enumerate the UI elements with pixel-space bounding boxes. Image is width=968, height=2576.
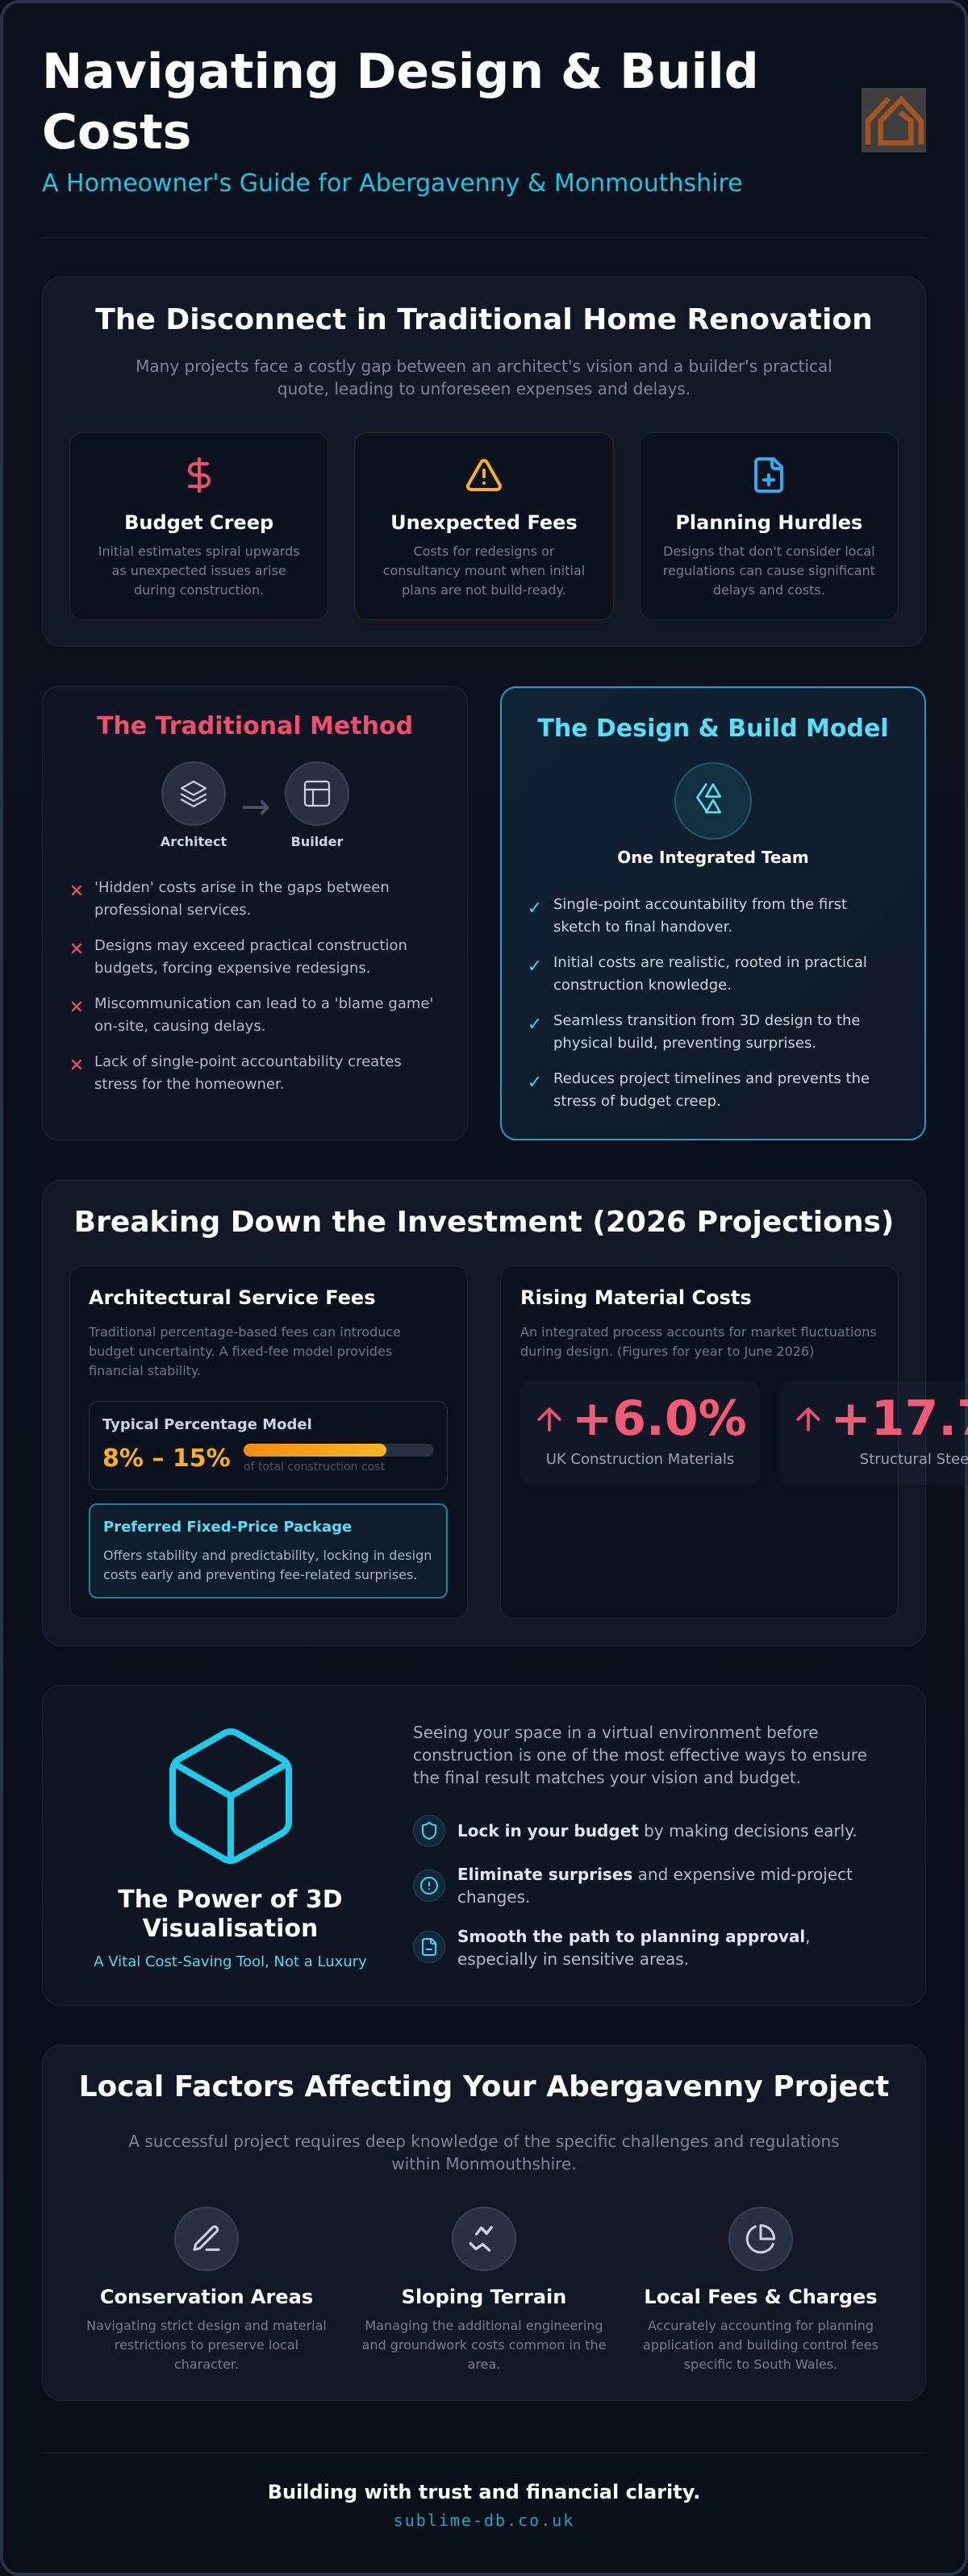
- card text: delays and costs.: [713, 582, 825, 598]
- benefit text: especially in sensitive areas.: [457, 1949, 689, 1969]
- intro text: Seeing your space in a virtual environment before: [413, 1723, 819, 1742]
- title: Costs: [42, 104, 191, 160]
- intro text: within Monmouthshire.: [391, 2153, 577, 2173]
- box text: costs early and preventing fee-related surprises.: [103, 1566, 417, 1582]
- list: benefits: ✓: [528, 1015, 542, 1035]
- icon: shield: [413, 1815, 445, 1847]
- caption: of total construction cost: [244, 1461, 385, 1473]
- card text: [89, 1324, 401, 1378]
- intro text: construction is one of the most effective ways to ensure: [413, 1745, 867, 1765]
- box title: Typical Percentage Model: [102, 1416, 312, 1433]
- label: architect: Architect: [161, 834, 227, 849]
- icon: dollar: [188, 457, 211, 493]
- card: budget creep: [69, 432, 328, 620]
- progress bar: [244, 1444, 434, 1457]
- heading: The Traditional Method: [97, 712, 413, 740]
- card title: Budget Creep: [124, 511, 273, 534]
- card text: financial stability.: [89, 1363, 201, 1378]
- card title: Planning Hurdles: [675, 511, 862, 534]
- panel: traditional method: [42, 686, 468, 1140]
- icon: pie chart: [728, 2207, 793, 2271]
- stat value: +6.0%: [572, 1390, 747, 1447]
- list: drawbacks: ✕: [69, 998, 84, 1018]
- intro text: Many projects face a costly gap between an architect's vision and a builder's practical: [136, 356, 832, 376]
- list: benefits: stress of budget creep.: [553, 1093, 721, 1110]
- column title: Sloping Terrain: [402, 2286, 566, 2308]
- heading: The Disconnect in Traditional Home Renovation: [95, 303, 873, 336]
- intro text: the final result matches your vision and budget.: [413, 1768, 801, 1787]
- column text: character.: [174, 2357, 239, 2372]
- column: conservation areas: [86, 2207, 327, 2372]
- icon: alert circle: [413, 1869, 445, 1902]
- card text: Initial estimates spiral upwards: [98, 544, 300, 559]
- list: benefits: physical build, preventing surprises.: [553, 1035, 816, 1052]
- box title: Preferred Fixed-Price Package: [103, 1519, 352, 1536]
- list: benefits: ✓: [528, 1073, 542, 1093]
- benefit: eliminate surprises: [413, 1865, 853, 1907]
- column text: Accurately accounting for planning: [648, 2318, 874, 2333]
- card text: Costs for redesigns or: [413, 544, 554, 559]
- list: benefits: construction knowledge.: [553, 977, 732, 994]
- list: drawbacks: ✕: [69, 940, 84, 960]
- column text: [643, 2318, 878, 2372]
- list: drawbacks: Lack of single-point accountability creates: [94, 1053, 402, 1070]
- title: [42, 44, 759, 160]
- list: drawbacks: ✕: [69, 1056, 84, 1076]
- card text: during construction.: [134, 582, 264, 598]
- heading: [118, 1886, 343, 1943]
- header: [42, 44, 926, 238]
- panel: the disconnect: [42, 277, 926, 647]
- icon: builder: [285, 761, 349, 826]
- card: architectural service fees: [69, 1265, 468, 1619]
- icon: terrain: [452, 2207, 516, 2271]
- card: rising material costs: [500, 1265, 899, 1619]
- footer: [42, 2453, 926, 2541]
- column text: Managing the additional engineering: [365, 2318, 603, 2333]
- list: benefits: ✓: [528, 898, 542, 919]
- card text: [663, 544, 875, 598]
- icon: integrated team: [674, 762, 752, 840]
- benefit text: Lock in your budget by making decisions early.: [457, 1821, 857, 1840]
- column text: specific to South Wales.: [684, 2357, 837, 2372]
- card: unexpected fees: [354, 432, 614, 620]
- card text: regulations can cause significant: [663, 563, 875, 578]
- logo: [862, 88, 926, 152]
- list: drawbacks: professional services.: [94, 902, 251, 919]
- card text: during design. (Figures for year to June 2026): [520, 1344, 814, 1359]
- list: benefits: sketch to final handover.: [553, 919, 732, 936]
- card text: plans are not build-ready.: [402, 582, 566, 598]
- footer tagline: Building with trust and financial clarity.: [268, 2481, 700, 2503]
- card heading: Rising Material Costs: [520, 1286, 752, 1309]
- card text: [520, 1324, 877, 1359]
- subtitle: A Homeowner's Guide for Abergavenny & Monmouthshire: [42, 169, 743, 198]
- typical percentage box: [89, 1401, 448, 1490]
- column text: [362, 2318, 606, 2372]
- benefit text: [457, 1927, 811, 1969]
- column text: restrictions to preserve local: [115, 2337, 298, 2353]
- heading: Local Factors Affecting Your Abergavenny Project: [79, 2070, 889, 2103]
- card text: consultancy mount when initial: [383, 563, 585, 578]
- card text: Designs that don't consider local: [663, 544, 875, 559]
- heading: The Power of 3D: [118, 1886, 343, 1914]
- fixed price box: [89, 1503, 448, 1599]
- icon: pen: [174, 2207, 239, 2271]
- panel: design and build model: [500, 686, 926, 1140]
- panel: local factors: [42, 2045, 926, 2401]
- icon: warning: [466, 459, 502, 491]
- card: planning hurdles: [640, 432, 899, 620]
- heading: The Design & Build Model: [537, 715, 889, 743]
- panel: breaking down the investment: [42, 1180, 926, 1646]
- icon: file plus: [754, 457, 783, 493]
- list: drawbacks: on-site, causing delays.: [94, 1018, 265, 1035]
- list: drawbacks: [69, 879, 433, 1093]
- value: 8% – 15%: [102, 1444, 231, 1473]
- icon: architect: [161, 761, 226, 826]
- benefit: planning approval: [413, 1927, 811, 1969]
- column text: and groundwork costs common in the: [362, 2337, 606, 2353]
- list: drawbacks: 'Hidden' costs arise in the gaps between: [94, 879, 390, 896]
- list: benefits: [528, 896, 870, 1110]
- box text: Offers stability and predictability, locking in design: [103, 1547, 432, 1563]
- intro text: [136, 356, 832, 398]
- column: sloping terrain: [362, 2207, 606, 2372]
- list: benefits: Seamless transition from 3D design to the: [553, 1012, 861, 1029]
- list: drawbacks: budgets, forcing expensive redesigns.: [94, 960, 370, 977]
- intro text: quote, leading to unforeseen expenses and delays.: [277, 379, 691, 398]
- list: benefits: Single-point accountability from the first: [553, 896, 847, 913]
- column: local fees and charges: [643, 2207, 878, 2372]
- card text: [383, 544, 585, 598]
- benefit text: [457, 1865, 853, 1907]
- column text: Navigating strict design and material: [86, 2318, 327, 2333]
- stat: uk construction materials: [520, 1382, 760, 1485]
- list: drawbacks: ✕: [69, 882, 84, 902]
- list: drawbacks: Miscommunication can lead to a 'blame game': [94, 995, 433, 1012]
- benefit: lock in budget: [413, 1815, 857, 1847]
- heading: Breaking Down the Investment (2026 Projections): [74, 1206, 894, 1239]
- benefit text: Eliminate surprises and expensive mid-project: [457, 1865, 853, 1884]
- card text: [98, 544, 300, 598]
- arrow: →: [241, 786, 270, 827]
- stat label: UK Construction Materials: [546, 1451, 734, 1468]
- list: benefits: Initial costs are realistic, rooted in practical: [553, 954, 867, 971]
- icon: file: [413, 1931, 445, 1963]
- column text: [86, 2318, 327, 2372]
- list: benefits: ✓: [528, 957, 542, 977]
- box text: [103, 1547, 432, 1582]
- card title: Unexpected Fees: [390, 511, 578, 534]
- icon: arrow up: [537, 1407, 561, 1432]
- list: drawbacks: Designs may exceed practical construction: [94, 937, 407, 954]
- stat: structural steel: [779, 1382, 968, 1485]
- column text: area.: [468, 2357, 500, 2372]
- column text: application and building control fees: [643, 2337, 878, 2353]
- intro text: A successful project requires deep knowledge of the specific challenges and regulations: [128, 2131, 840, 2150]
- benefit text: changes.: [457, 1887, 530, 1907]
- icon: cube: [169, 1728, 292, 1864]
- card text: Traditional percentage-based fees can introduce: [89, 1324, 401, 1340]
- label: one integrated team: One Integrated Team: [617, 848, 809, 867]
- panel: power of 3D visualisation: [42, 1685, 926, 2006]
- column title: Local Fees & Charges: [644, 2286, 878, 2308]
- card heading: Architectural Service Fees: [89, 1286, 376, 1309]
- list: benefits: Reduces project timelines and prevents the: [553, 1070, 870, 1087]
- card text: An integrated process accounts for market fluctuations: [520, 1324, 877, 1340]
- card text: budget uncertainty. A fixed-fee model provides: [89, 1344, 392, 1359]
- heading: Visualisation: [143, 1915, 318, 1943]
- intro text: [413, 1723, 867, 1787]
- list: drawbacks: stress for the homeowner.: [94, 1076, 284, 1093]
- label: builder: Builder: [291, 834, 343, 849]
- icon: arrow up: [796, 1407, 820, 1432]
- intro text: [128, 2131, 840, 2173]
- tagline: A Vital Cost-Saving Tool, Not a Luxury: [94, 1953, 367, 1970]
- column title: Conservation Areas: [100, 2286, 313, 2308]
- card text: as unexpected issues arise: [112, 563, 286, 578]
- footer url: sublime-db.co.uk: [394, 2511, 574, 2530]
- title: Navigating Design & Build: [42, 44, 759, 100]
- benefit text: Smooth the path to planning approval,: [457, 1927, 811, 1946]
